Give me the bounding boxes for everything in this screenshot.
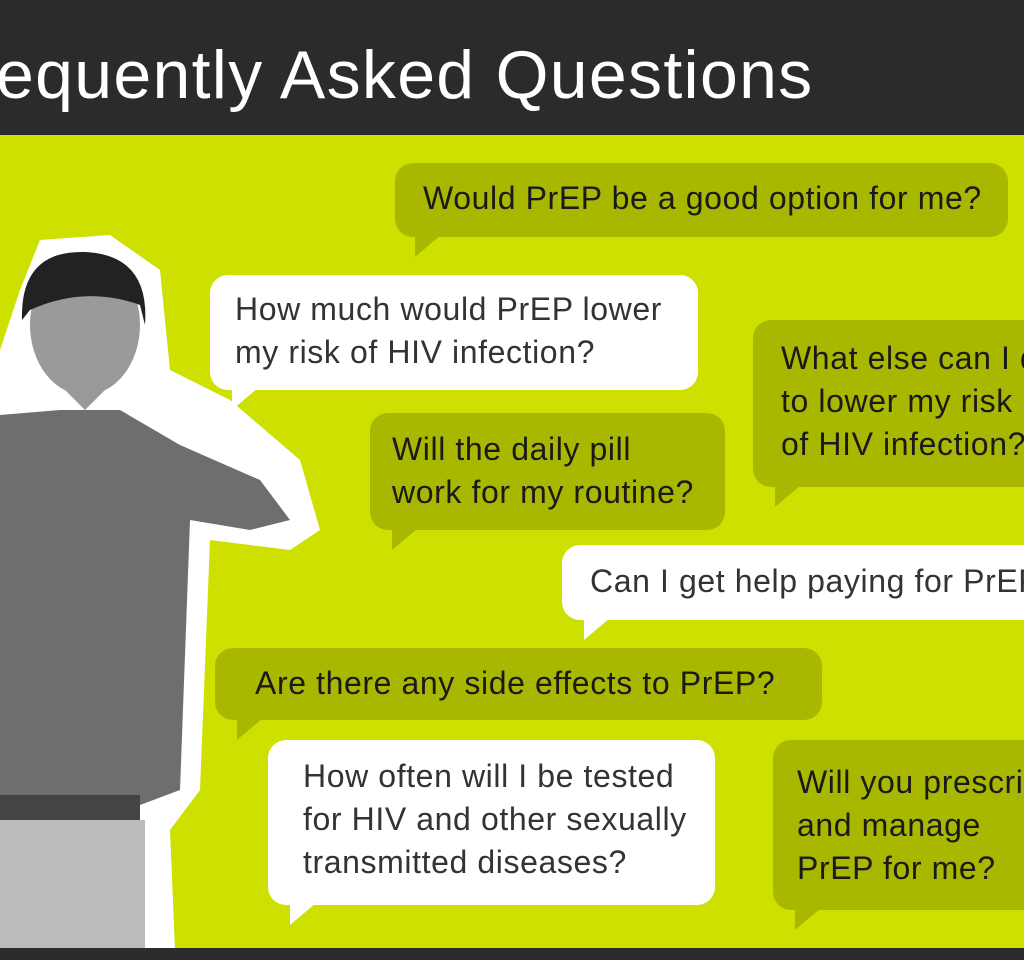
tail bbox=[795, 910, 818, 930]
bubble: lower risk: How much would PrEP lower bbox=[235, 291, 662, 327]
title: equently Asked Questions bbox=[0, 37, 813, 113]
tail bbox=[237, 720, 260, 740]
bubble: lower risk bbox=[210, 275, 698, 390]
bubble: daily pill: Will the daily pill bbox=[392, 431, 631, 467]
bubble: tested: for HIV and other sexually bbox=[303, 801, 687, 837]
bubble: side effects: Are there any side effects to PrEP? bbox=[255, 665, 775, 701]
bubble: what else: to lower my risk bbox=[781, 383, 1013, 419]
tail bbox=[232, 390, 256, 406]
bubble: tested: How often will I be tested bbox=[303, 758, 674, 794]
bubble: tested bbox=[268, 740, 715, 905]
tail bbox=[290, 905, 314, 925]
bubble: tested: transmitted diseases? bbox=[303, 844, 627, 880]
tail bbox=[775, 487, 798, 507]
bubble: daily pill: work for my routine? bbox=[392, 474, 694, 510]
bubble: daily pill bbox=[370, 413, 725, 530]
bubble: prescribe bbox=[773, 740, 1024, 910]
bubble: prescribe: and manage bbox=[797, 807, 981, 843]
bubble: prescribe: PrEP for me? bbox=[797, 850, 996, 886]
header band bbox=[0, 0, 1024, 135]
bubble: what else: of HIV infection? bbox=[781, 426, 1024, 462]
tail bbox=[392, 530, 416, 550]
bubble: what else bbox=[753, 320, 1024, 487]
person photo bbox=[0, 235, 320, 948]
bubble: good option: Would PrEP be a good option for me? bbox=[423, 180, 982, 216]
bubble: paying bbox=[562, 545, 1024, 620]
tail bbox=[584, 620, 608, 640]
tail bbox=[415, 237, 438, 257]
bubble: good option bbox=[395, 163, 1008, 237]
bubble: lower risk: my risk of HIV infection? bbox=[235, 334, 595, 370]
footer band bbox=[0, 948, 1024, 960]
bubble: side effects bbox=[215, 648, 822, 720]
